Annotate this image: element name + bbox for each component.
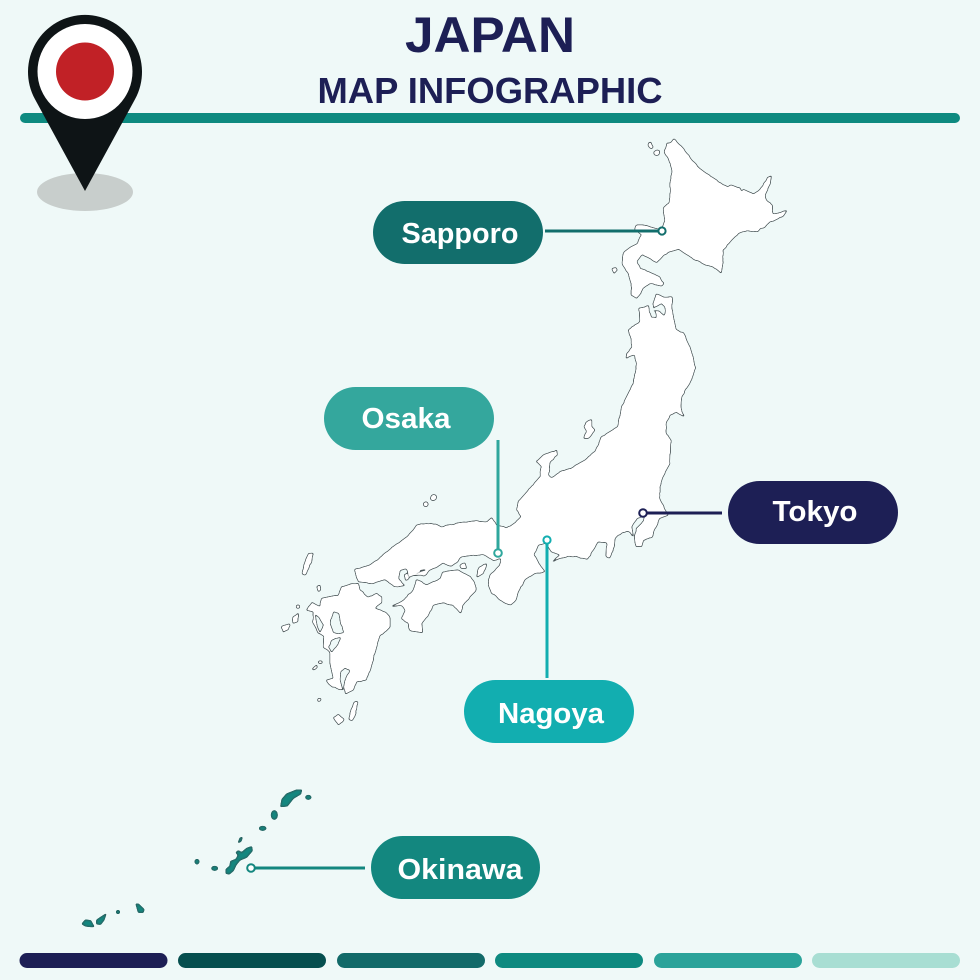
- callout: Tokyo: Tokyo: [772, 496, 858, 528]
- callout: Osaka: Osaka: [362, 403, 451, 435]
- callout: Sapporo: [373, 201, 666, 264]
- callout: Okinawa: Okinawa: [398, 854, 523, 886]
- Shikoku, Kyushu and smaller islands: [282, 495, 487, 725]
- icon: location pin with Japan flag: [28, 15, 142, 211]
- Hokkaido: [612, 139, 787, 298]
- Honshu: [355, 294, 695, 605]
- callout: Sapporo: Sapporo: [402, 218, 518, 250]
- subtitle: MAP INFOGRAPHIC: [318, 70, 662, 111]
- title: JAPAN: [405, 7, 575, 63]
- Sado island: [584, 419, 595, 438]
- colour bars footer: [20, 953, 960, 968]
- callout: Nagoya: [464, 536, 634, 743]
- callout: Okinawa: [247, 836, 540, 899]
- callout: Nagoya: Nagoya: [498, 698, 605, 730]
- callout: Osaka: [324, 387, 502, 557]
- callout: Tokyo: [639, 481, 898, 544]
- map: Okinawa islands: [82, 790, 311, 927]
- map: main islands of Japan: [282, 139, 787, 725]
- header rule: [20, 113, 960, 123]
